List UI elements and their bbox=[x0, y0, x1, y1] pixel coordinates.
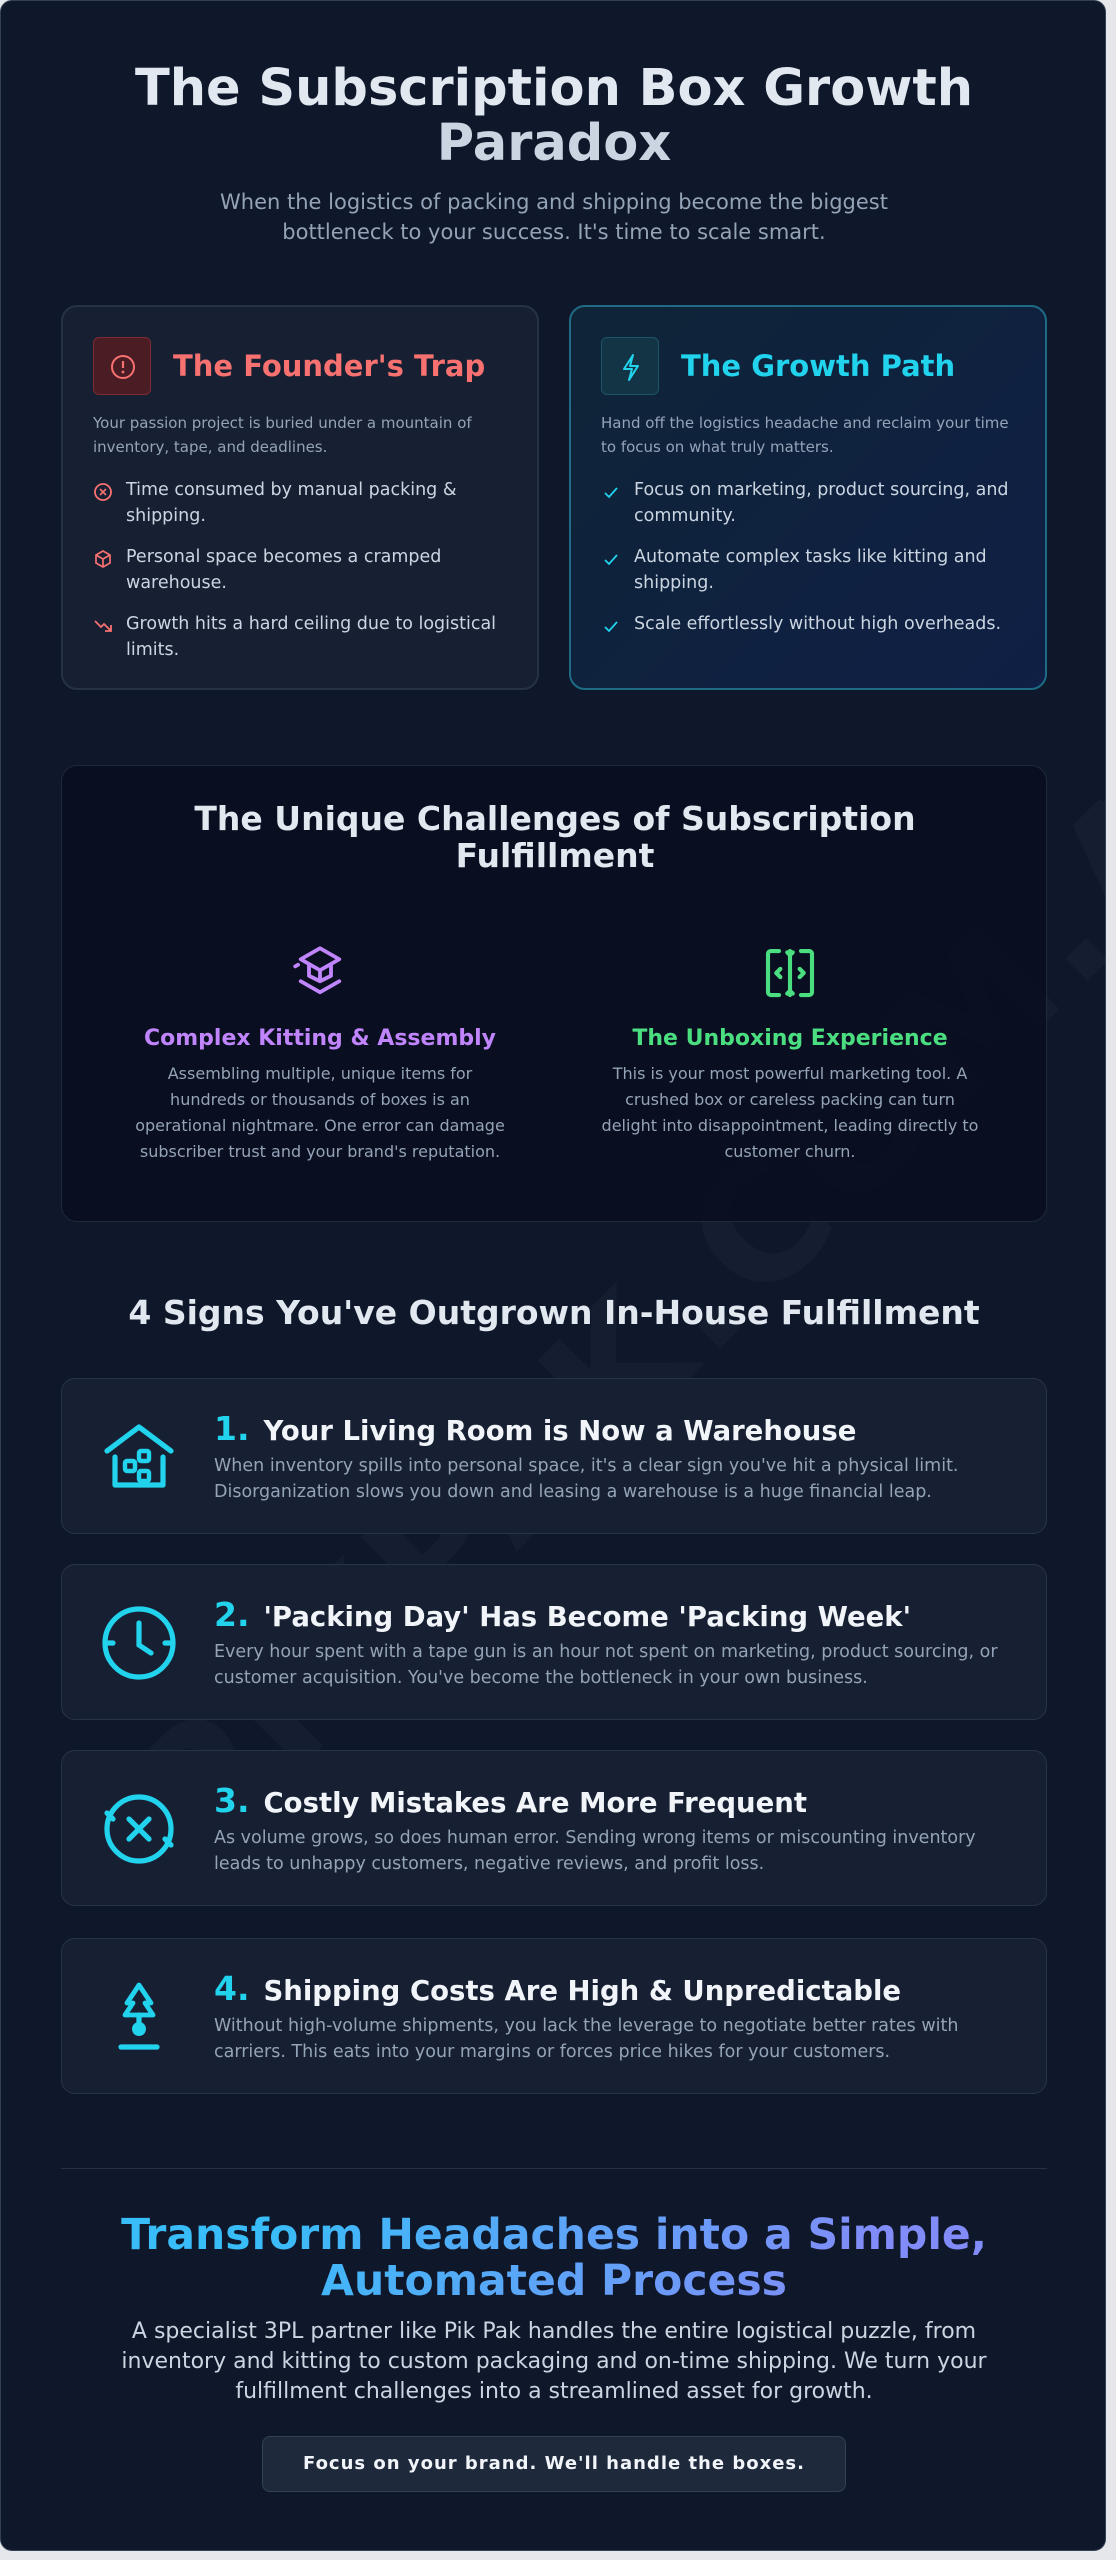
description: Hand off the logistics headache and reclaim your time to focus on what truly matters. bbox=[601, 414, 1009, 456]
list item 1: Focus on marketing, product sourcing, and community. bbox=[634, 480, 1009, 526]
subheading: The Unboxing Experience bbox=[632, 1026, 948, 1051]
sign 1 bbox=[61, 1378, 1047, 1534]
title: The Subscription Box Growth bbox=[135, 59, 973, 118]
challenge: unboxing bbox=[602, 949, 978, 1161]
cta heading bbox=[61, 2213, 1047, 2305]
subtitle: When the logistics of packing and shipping become the biggest bottleneck to your success. It's time to scale smart. bbox=[220, 190, 888, 244]
icon: bolt bbox=[601, 337, 659, 395]
sign 4 bbox=[61, 1938, 1047, 2094]
panel: unique challenges bbox=[61, 765, 1047, 1222]
cta button: Focus on your brand. We'll handle the boxes. bbox=[303, 2453, 805, 2474]
icon: unboxing bbox=[766, 949, 814, 998]
heading bbox=[194, 799, 916, 875]
cta button bbox=[262, 2436, 846, 2492]
list item 2: Automate complex tasks like kitting and shipping. bbox=[634, 547, 987, 593]
icon: error bbox=[104, 1794, 174, 1864]
icon: house bbox=[104, 1424, 174, 1488]
icon: kitting bbox=[293, 946, 342, 994]
title bbox=[135, 59, 973, 173]
list item 3: Growth hits a hard ceiling due to logistical limits. bbox=[126, 614, 496, 660]
cta text: A specialist 3PL partner like Pik Pak handles the entire logistical puzzle, from inventory and kitting to custom packaging and on-time shipping. We turn your fulfillment challenges into a streamlined asset for growth. bbox=[121, 2319, 987, 2404]
sign 1: When inventory spills into personal space, it's a clear sign you've hit a physical limit. Disorganization slows you down and leasing a warehouse is a huge financial leap. bbox=[214, 1456, 958, 1502]
text: Assembling multiple, unique items for hundreds or thousands of boxes is an operational nightmare. One error can damage subscriber trust and your brand's reputation. bbox=[135, 1064, 505, 1161]
list item 3: Scale effortlessly without high overheads. bbox=[634, 614, 1001, 634]
heading: The Growth Path bbox=[681, 349, 955, 383]
list item 2: Personal space becomes a cramped warehouse. bbox=[126, 547, 441, 593]
sign 3 bbox=[61, 1750, 1047, 1906]
title: Paradox bbox=[437, 114, 671, 173]
sign 4: 4. Shipping Costs Are High & Unpredictable bbox=[214, 1969, 901, 2008]
cta heading: Automated Process bbox=[321, 2257, 787, 2306]
sign 2: Every hour spent with a tape gun is an hour not spent on marketing, product sourcing, or customer acquisition. You've become the bottleneck in your own business. bbox=[214, 1642, 998, 1688]
sign 1: 1. Your Living Room is Now a Warehouse bbox=[214, 1409, 856, 1448]
icon: clock bbox=[102, 1606, 176, 1680]
sign 4: Without high-volume shipments, you lack the leverage to negotiate better rates with carriers. This eats into your margins or forces price hikes for your customers. bbox=[214, 2016, 958, 2062]
list item 1: Time consumed by manual packing & shipping. bbox=[126, 480, 456, 526]
subheading: Complex Kitting & Assembly bbox=[144, 1026, 496, 1051]
icon: alert bbox=[93, 337, 151, 395]
sign 3: 3. Costly Mistakes Are More Frequent bbox=[214, 1781, 807, 1820]
heading: The Founder's Trap bbox=[173, 349, 485, 383]
heading: Fulfillment bbox=[456, 836, 654, 875]
panel: growth path bbox=[569, 305, 1047, 690]
icon: shipping cost bbox=[118, 1982, 160, 2050]
sign 2 bbox=[61, 1564, 1047, 1720]
cta heading: Transform Headaches into a Simple, bbox=[121, 2211, 987, 2260]
sign 2: 2. 'Packing Day' Has Become 'Packing Week' bbox=[214, 1595, 911, 1634]
sign 3: As volume grows, so does human error. Sending wrong items or miscounting inventory leads to unhappy customers, negative reviews, and profit loss. bbox=[214, 1828, 976, 1874]
heading: 4 signs: 4 Signs You've Outgrown In-House Fulfillment bbox=[128, 1293, 980, 1332]
text: This is your most powerful marketing tool. A crushed box or careless packing can turn delight into disappointment, leading directly to customer churn. bbox=[602, 1064, 978, 1161]
panel: founder's trap bbox=[61, 305, 539, 690]
description: Your passion project is buried under a mountain of inventory, tape, and deadlines. bbox=[93, 414, 472, 456]
heading: The Unique Challenges of Subscription bbox=[194, 799, 916, 838]
challenge: kitting bbox=[135, 946, 505, 1161]
